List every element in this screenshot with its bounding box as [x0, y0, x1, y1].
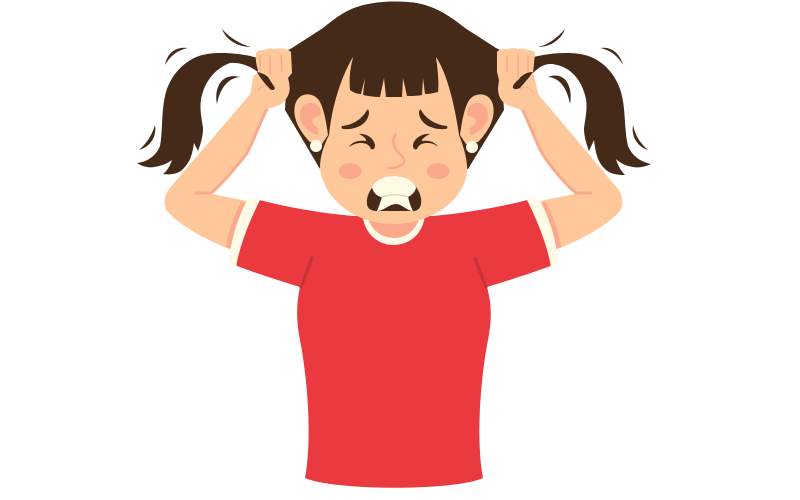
nose [389, 134, 404, 168]
eyebrows [342, 110, 447, 129]
hair back with crown [285, 1, 504, 169]
left sleeve cuff [229, 198, 260, 267]
neck and collar [363, 216, 425, 245]
lower teeth [377, 196, 413, 211]
sleeve fold left [301, 258, 312, 287]
right sleeve cuff [527, 198, 558, 267]
right pigtail [530, 53, 651, 175]
sleeve fold right [475, 258, 486, 287]
fringe [348, 45, 440, 97]
cheeks [338, 163, 450, 179]
earrings [310, 140, 478, 153]
left arm [165, 48, 292, 250]
open mouth [367, 176, 421, 211]
squeezed eyes [349, 134, 438, 149]
right arm [497, 48, 622, 250]
left fist [250, 48, 292, 109]
upper teeth [372, 176, 416, 197]
left ear [294, 94, 328, 144]
face [320, 57, 467, 224]
right ear [460, 94, 494, 144]
red t-shirt [229, 198, 558, 488]
left pigtail [137, 53, 258, 174]
right fist [497, 48, 539, 110]
flying hair wisps [139, 29, 648, 150]
